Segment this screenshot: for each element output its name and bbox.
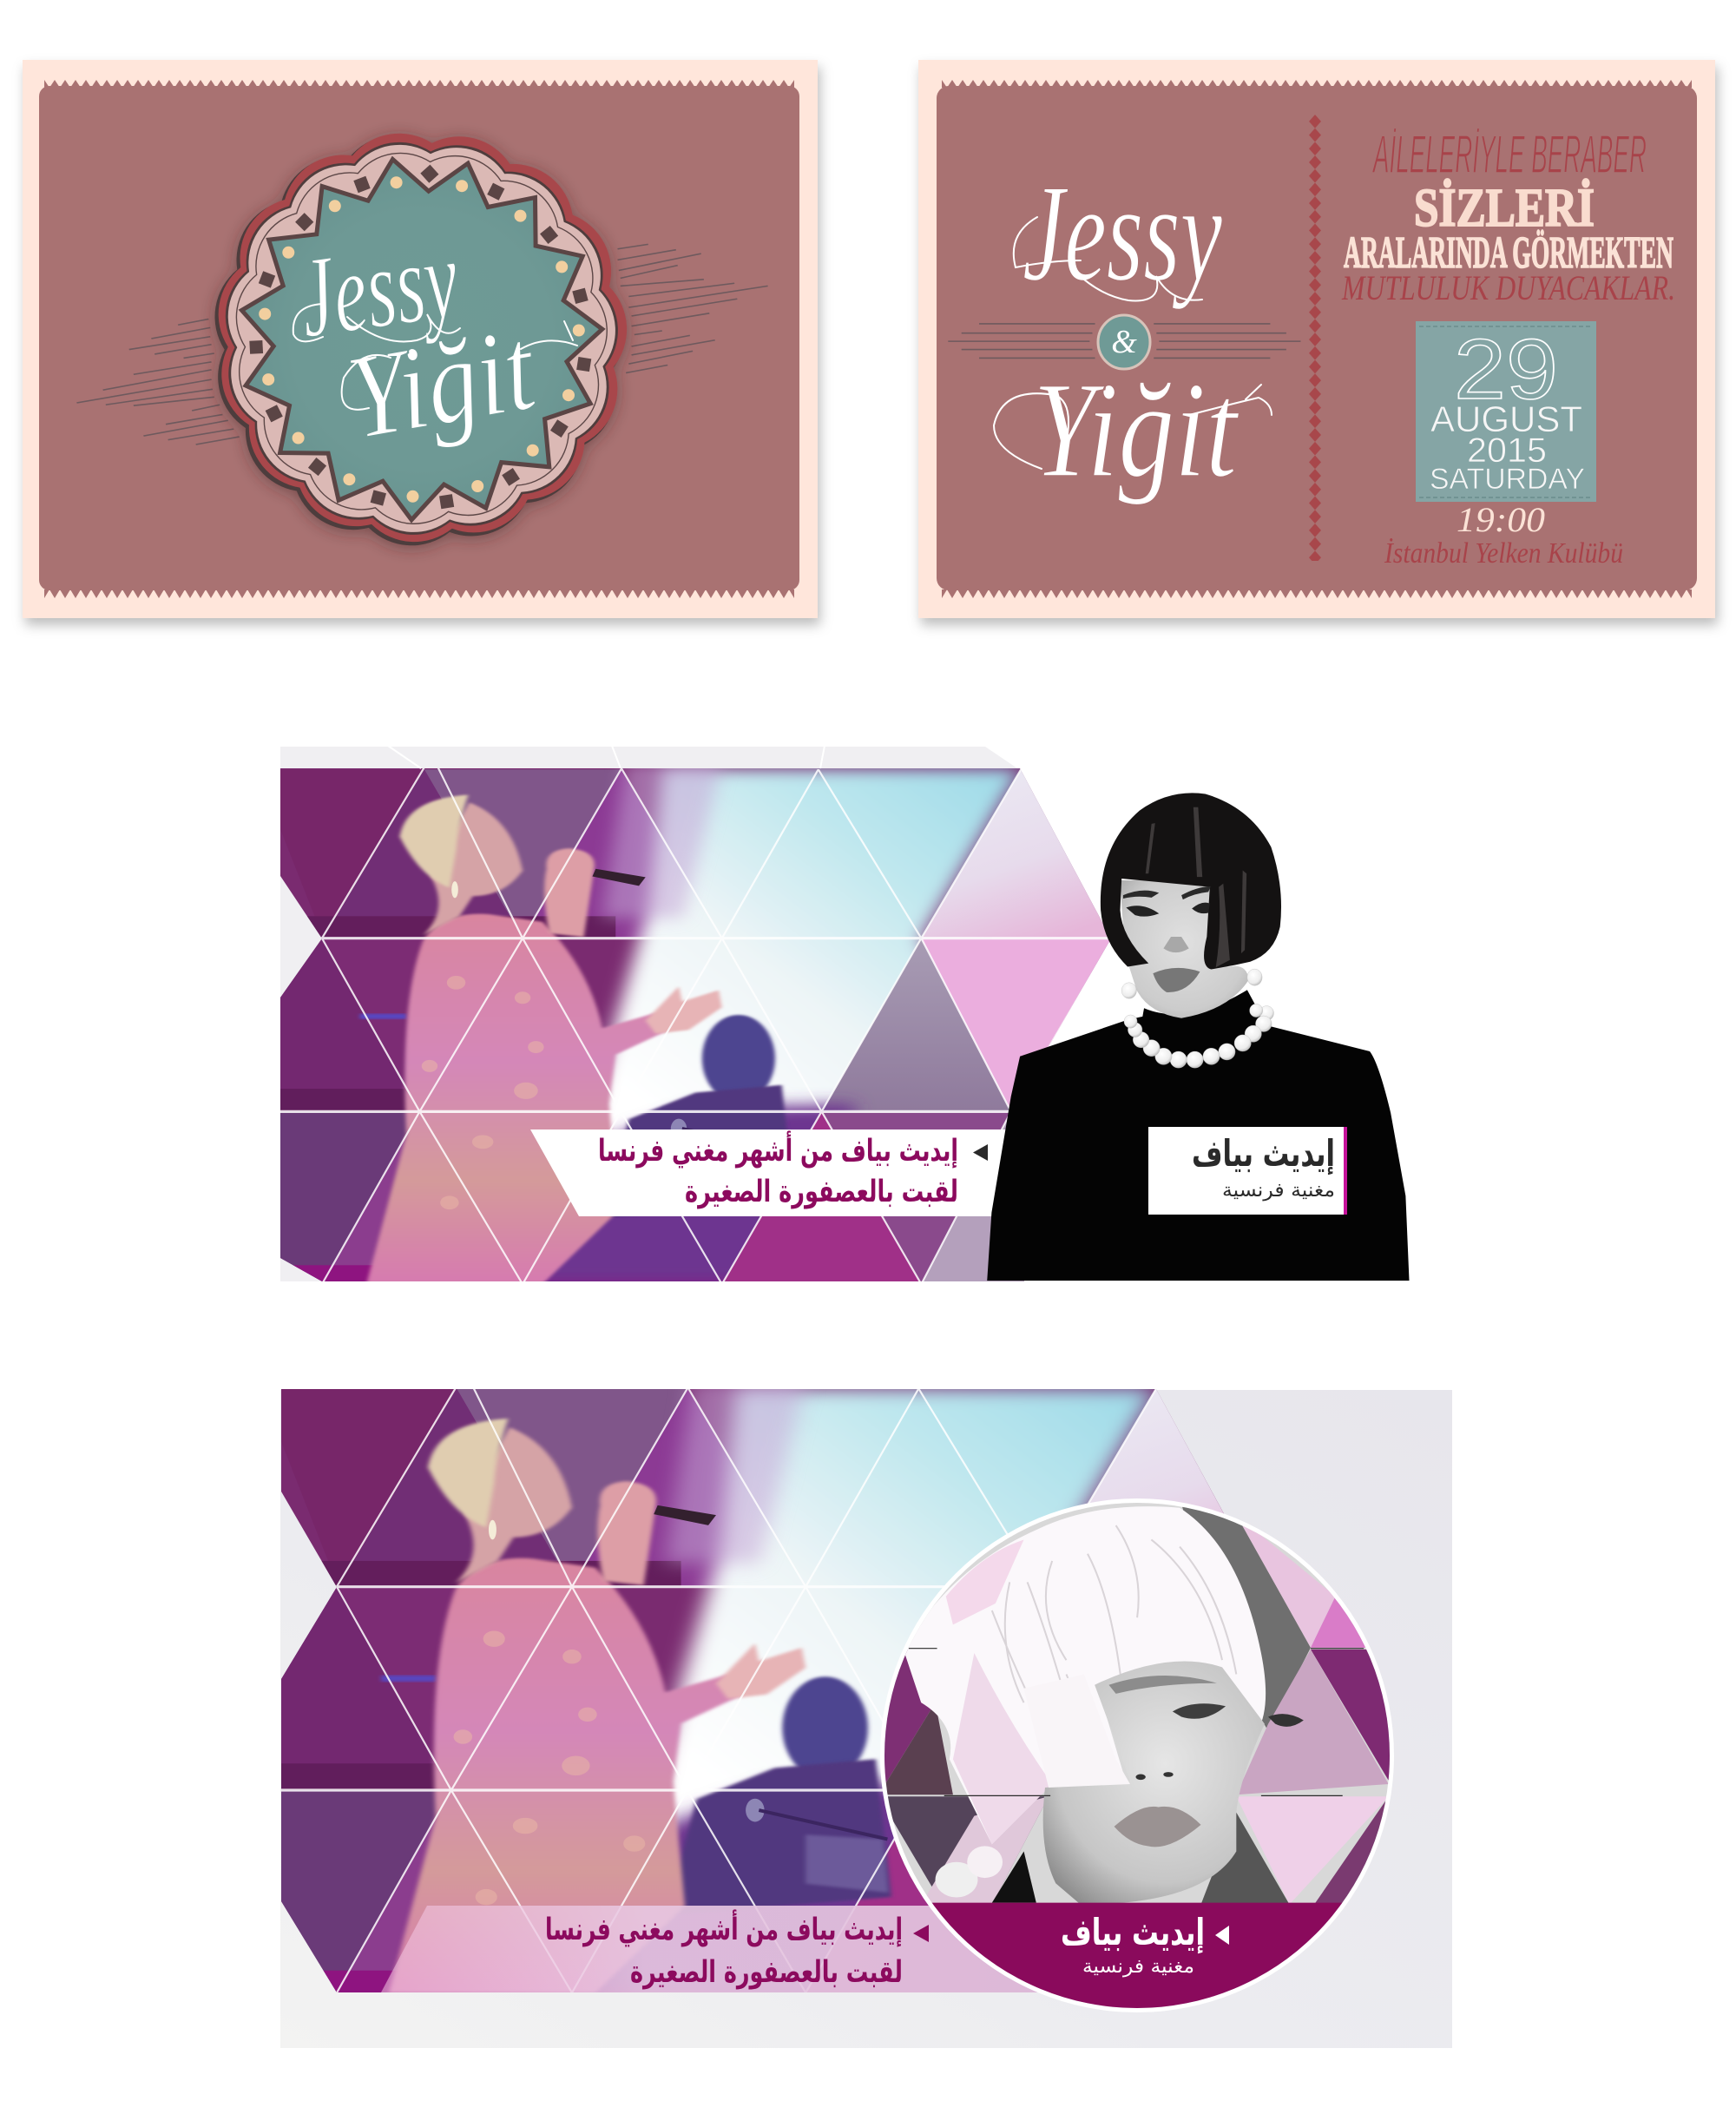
caption banner: إيديث بياف من أشهر مغني فرنسا — [598, 1130, 958, 1169]
arrow — [913, 1925, 929, 1942]
arrow — [1215, 1926, 1229, 1945]
blonde hair — [904, 1506, 1266, 1844]
date card: SATURDAY — [1430, 463, 1585, 496]
card paper — [918, 60, 1715, 618]
headline text stack — [1341, 125, 1675, 307]
name: Yiğit: Yiğit — [1033, 354, 1240, 506]
black collar — [992, 1851, 1036, 1903]
date card: AUGUST — [1430, 398, 1582, 439]
badge dark diamonds — [249, 165, 591, 509]
card paper — [23, 60, 818, 618]
decorative speed lines — [76, 244, 768, 445]
round portrait: مغنية فرنسية — [1082, 1956, 1194, 1978]
inner rose panel with zigzag edge — [39, 80, 799, 598]
decorative lines and ampersand medallion: & — [1111, 324, 1137, 360]
date card: 29 — [1454, 321, 1558, 417]
name plate: مغنية فرنسية — [1222, 1180, 1335, 1202]
round portrait: إيديث بياف — [1061, 1911, 1205, 1954]
arrow — [973, 1144, 988, 1161]
scalloped badge — [215, 134, 627, 545]
caption banner — [530, 1129, 1007, 1216]
name plate — [1148, 1127, 1347, 1215]
badge names: Jessy — [292, 214, 466, 362]
badge cream dots — [259, 176, 585, 503]
panel: invitation card inside — [918, 60, 1715, 618]
face — [1121, 880, 1249, 1018]
caption banner: لقبت بالعصفورة الصغيرة — [630, 1955, 903, 1990]
badge names: Yiğit — [339, 301, 546, 464]
name: Jessy — [1014, 155, 1223, 310]
diamond divider — [1309, 115, 1321, 561]
purple name band — [932, 1903, 1342, 2008]
eye, brow, nose and lips — [1108, 1676, 1304, 1847]
portrait: woman in black with pearls — [987, 793, 1410, 1281]
panel background — [280, 1390, 1452, 2048]
pearl necklace — [1121, 969, 1273, 1068]
stage photo collage with triangle lattice — [281, 1389, 1224, 1992]
panel: title graphic with round portrait — [280, 1389, 1452, 2048]
badge star with teal fabric — [241, 160, 602, 520]
name: Jessy: Jessy — [1023, 155, 1223, 310]
thin lattice lines through portrait — [909, 1649, 1364, 1795]
lower band of lattice lines on strip — [388, 746, 825, 768]
headline text stack: SİZLERİ — [1414, 179, 1595, 238]
panel: envelope card front — [23, 60, 818, 618]
date card: 2015 — [1467, 431, 1547, 470]
round portrait — [880, 1498, 1394, 2012]
date card — [1416, 321, 1596, 502]
eyes, brows, nose and lips — [1123, 886, 1211, 992]
caption banner — [381, 1906, 1042, 1992]
caption banner: لقبت بالعصفورة الصغيرة — [685, 1175, 958, 1209]
black jacket — [987, 990, 1410, 1281]
portrait montage — [884, 1503, 1390, 2008]
decorative lines and ampersand medallion — [948, 315, 1300, 369]
name plate: إيديث بياف — [1192, 1132, 1335, 1176]
stage photo collage with triangle lattice — [280, 768, 1109, 1281]
translucent top strip and left gaps — [280, 747, 1017, 1281]
hair — [1101, 793, 1281, 970]
venue: İstanbul Yelken Kulübü — [1384, 537, 1623, 570]
badge names — [292, 214, 577, 464]
face — [1043, 1662, 1265, 1905]
caption banner: إيديث بياف من أشهر مغني فرنسا — [545, 1909, 903, 1947]
inner rose panel with zigzag edge — [937, 80, 1697, 598]
time: 19:00 — [1457, 500, 1545, 539]
panel: title graphic with portrait — [217, 740, 1410, 1294]
